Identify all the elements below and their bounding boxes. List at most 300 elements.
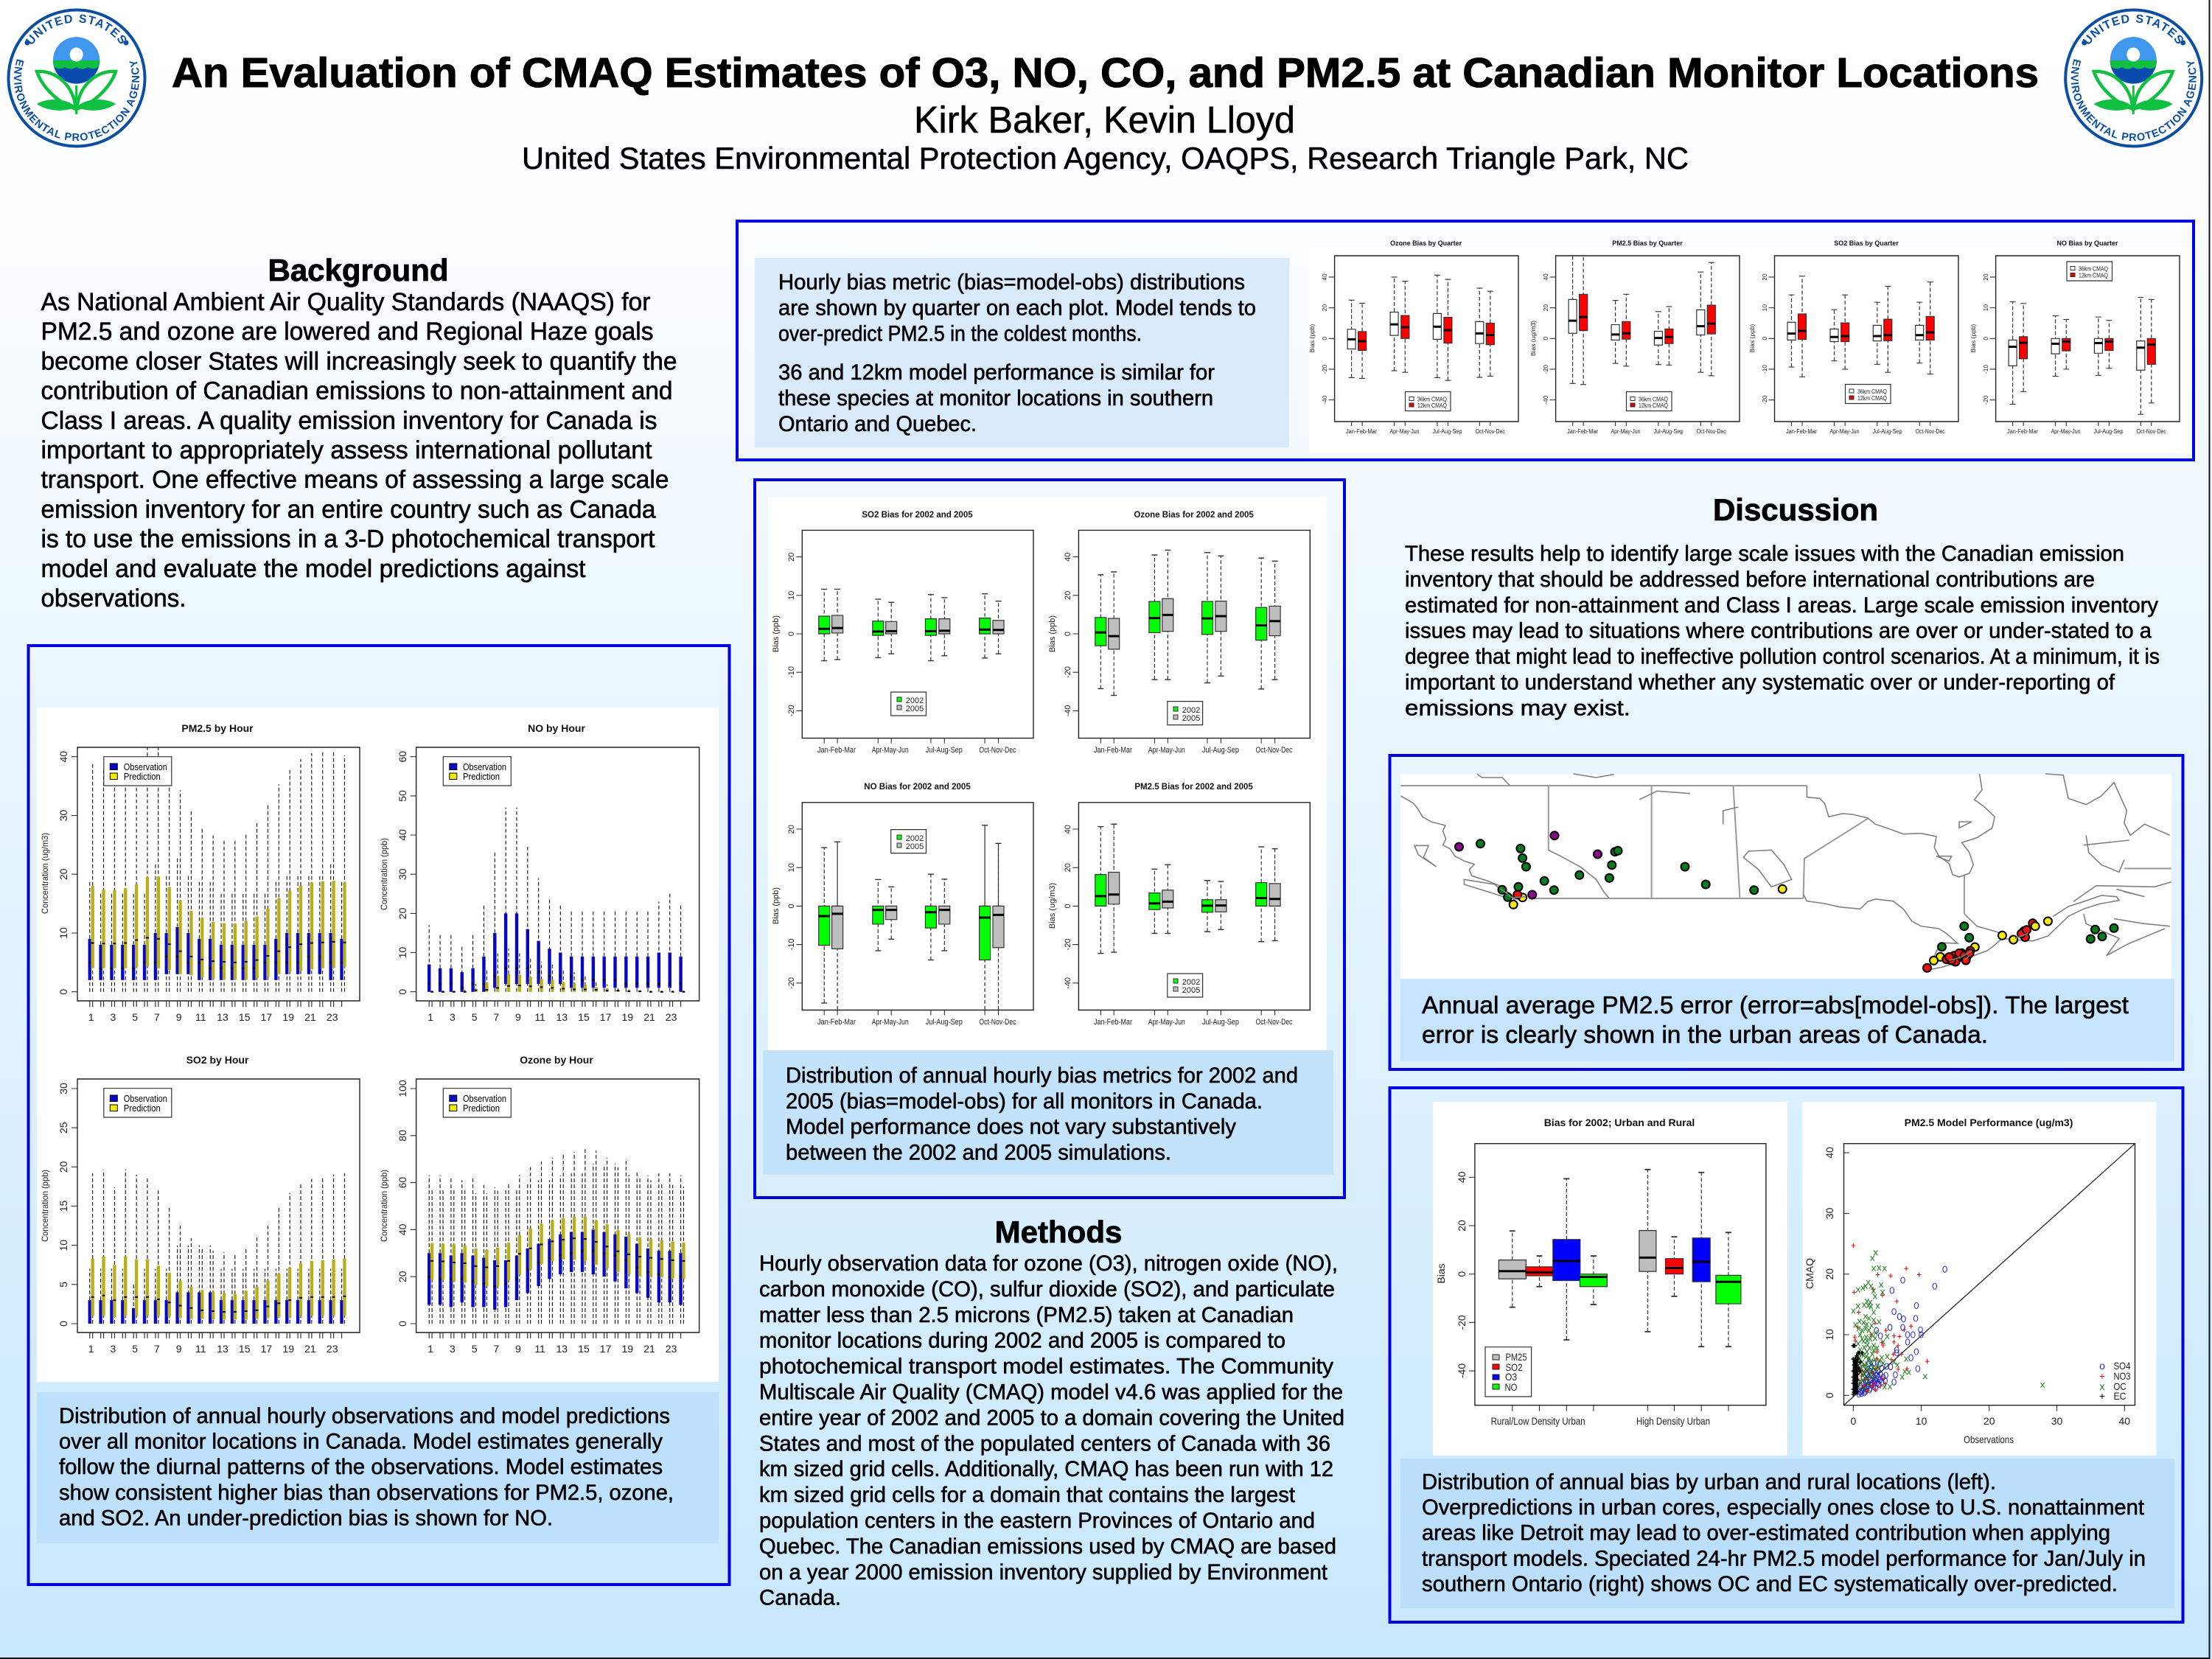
chart: Bias for 2002 Urban and Rural: PM25	[1505, 1351, 1527, 1363]
chart: Ozone by Hour: 21	[643, 1343, 655, 1355]
text block: Methods: carbon monoxide (CO), sulfur dioxide (SO2), and particulate	[759, 1277, 1335, 1302]
caption: hourly distributions: show consistent higher bias than observations for PM2.5, ozone,	[59, 1481, 674, 1505]
chart: PM2.5 Model Performance: EC	[2114, 1390, 2126, 1402]
chart: Ozone Bias by Quarter: Jul-Aug-Sep	[1433, 427, 1462, 435]
chart: NO by Hour: NO by Hour	[528, 722, 585, 734]
chart: PM2.5 Bias by Quarter: PM2.5 Bias by Quarter	[1612, 240, 1683, 247]
chart: Bias for 2002 Urban and Rural: SO2	[1505, 1361, 1523, 1373]
affiliation: United States Environmental Protection Agency, OAQPS, Research Triangle Park, NC	[522, 141, 1689, 175]
chart: Bias for 2002 Urban and Rural: Bias for 2002; Urban and Rural	[1544, 1117, 1695, 1128]
chart: Ozone by Hour: 40	[397, 1223, 408, 1235]
chart: SO2 by Hour: 5	[57, 1282, 69, 1288]
chart: PM2.5 by Hour: 0	[57, 989, 69, 995]
chart: PM2.5 by Hour: 13	[217, 1011, 228, 1023]
icon: EPA logo right: ENVIRONMENTAL PROTECTION AGENCY	[2071, 59, 2197, 142]
chart: NO Bias by Quarter: 20	[1982, 273, 1989, 281]
chart: SO2 by Hour: 19	[282, 1343, 294, 1355]
chart: NO Bias for 2002 and 2005: Jul-Aug-Sep	[926, 1018, 963, 1027]
chart: Bias for 2002 Urban and Rural: 0	[1456, 1271, 1468, 1277]
text block: Methods	[759, 1251, 1344, 1610]
panel: urban rural and PM2.5 performance	[1390, 1088, 2183, 1622]
chart: NO Bias by Quarter: NO Bias by Quarter	[2056, 240, 2118, 247]
chart: Ozone Bias by Quarter: -20	[1321, 365, 1328, 374]
chart: PM2.5 Model Performance: OC	[2114, 1380, 2126, 1392]
chart: Ozone by Hour: 0	[397, 1321, 408, 1327]
chart: Ozone by Hour: 17	[600, 1343, 612, 1355]
text block: Methods: on a year 2000 emission inventory supplied by Environment	[759, 1560, 1327, 1585]
chart: Ozone Bias by Quarter: -40	[1321, 395, 1328, 405]
chart: Ozone Bias by Quarter: Ozone Bias by Quarter	[1390, 240, 1462, 247]
chart: NO Bias for 2002 and 2005: Jan-Feb-Mar	[817, 1018, 856, 1027]
chart: PM2.5 Bias by Quarter	[1529, 240, 1740, 435]
chart: PM2.5 Model Performance: Observations	[1964, 1433, 2014, 1445]
text block: Discussion: issues may lead to situations where contributions are over or under-stated to a	[1405, 619, 2152, 643]
chart: NO by Hour: 40	[397, 829, 408, 841]
caption: urban rural and PM2.5 performance: Overpredictions in urban cores, especially ones close to U.S. nonattainment	[1422, 1495, 2144, 1520]
chart: SO2 by Hour: 17	[261, 1343, 272, 1355]
chart: NO Bias for 2002 and 2005: Apr-May-Jun	[872, 1018, 909, 1027]
text block: Discussion	[1405, 542, 2160, 720]
text block: Methods: entire year of 2002 and 2005 to a domain covering the United	[759, 1405, 1344, 1430]
chart: Ozone Bias for 2002 and 2005: 0	[1064, 632, 1072, 636]
caption: PM2.5 error map: Annual average PM2.5 error (error=abs[model-obs]). The largest	[1422, 991, 2129, 1019]
chart: PM2.5 Model Performance: 20	[1984, 1415, 1995, 1427]
chart: PM2.5 Bias by Quarter: 40	[1542, 273, 1549, 281]
chart: PM2.5 Bias by Quarter: 20	[1542, 304, 1549, 311]
chart: NO Bias for 2002 and 2005: 2005	[906, 842, 924, 851]
chart: SO2 Bias for 2002 and 2005	[772, 511, 1033, 755]
text block: Methods: monitor locations during 2002 and 2005 is compared to	[759, 1329, 1285, 1353]
chart: PM2.5 Bias for 2002 and 2005: Apr-May-Jun	[1148, 1018, 1185, 1027]
text block: Background: observations.	[41, 584, 186, 612]
icon: EPA logo left: ENVIRONMENTAL PROTECTION AGENCY	[14, 59, 139, 142]
chart: Ozone Bias for 2002 and 2005: Ozone Bias for 2002 and 2005	[1134, 511, 1254, 520]
panel: hourly distributions	[28, 646, 730, 1585]
chart: Ozone Bias for 2002 and 2005: Bias (ppb)	[1048, 615, 1057, 652]
chart: NO by Hour: 3	[450, 1011, 456, 1023]
chart: NO by Hour: 0	[397, 989, 408, 995]
chart: SO2 by Hour: 21	[304, 1343, 316, 1355]
chart: SO2 Bias by Quarter: Jan-Feb-Mar	[1786, 427, 1817, 435]
text block: Background: become closer States will increasingly seek to quantify the	[41, 348, 677, 376]
chart: PM2.5 by Hour: 23	[327, 1011, 338, 1023]
chart: Ozone Bias for 2002 and 2005	[1048, 511, 1310, 755]
text block: Discussion: These results help to identify large scale issues with the Canadian emission	[1405, 542, 2124, 566]
chart: Ozone Bias by Quarter: Bias (ppb)	[1308, 324, 1316, 352]
chart: SO2 Bias by Quarter: 36km CMAQ	[1857, 388, 1887, 395]
text block: Methods: matter less than 2.5 microns (PM2.5) taken at Canadian	[759, 1303, 1294, 1327]
chart: SO2 Bias for 2002 and 2005: Jul-Aug-Sep	[926, 746, 963, 755]
text block: Discussion: degree that might lead to ineffective pollution control scenarios. At a minimum, it is	[1405, 645, 2160, 669]
chart: PM2.5 Model Performance: o	[2099, 1360, 2105, 1372]
chart: SO2 by Hour: 3	[111, 1343, 116, 1355]
text block: Background: model and evaluate the model predictions against	[41, 555, 586, 583]
text block: Background	[41, 288, 677, 612]
chart: PM2.5 Bias for 2002 and 2005: 2005	[1182, 986, 1200, 995]
chart: PM2.5 Bias for 2002 and 2005: Bias (ug/m3)	[1048, 883, 1057, 929]
chart: PM2.5 Model Performance: +	[2099, 1370, 2105, 1382]
chart: NO by Hour: 13	[557, 1011, 568, 1023]
chart: PM2.5 Bias for 2002 and 2005: 20	[1064, 863, 1072, 872]
chart: NO Bias for 2002 and 2005: NO Bias for 2002 and 2005	[864, 783, 971, 792]
chart: PM2.5 Model Performance: NO3	[2114, 1370, 2131, 1382]
chart: Ozone by Hour: 20	[397, 1271, 408, 1282]
chart: NO Bias by Quarter: 0	[1982, 337, 1989, 340]
chart: PM2.5 Bias for 2002 and 2005	[1048, 783, 1310, 1027]
chart: Bias for 2002 Urban and Rural: 20	[1456, 1220, 1468, 1232]
text block: Methods: population centers in the eastern Provinces of Ontario and	[759, 1509, 1315, 1533]
text block: Background: is to use the emissions in a 3-D photochemical transport	[41, 525, 655, 553]
text block: Background: emission inventory for an entire country such as Canada	[41, 495, 656, 523]
chart: Ozone Bias for 2002 and 2005: 2002	[1182, 706, 1200, 715]
chart: SO2 Bias for 2002 and 2005: Bias (ppb)	[772, 615, 781, 652]
chart: NO by Hour: Observation	[463, 761, 506, 772]
chart: Ozone by Hour: 15	[578, 1343, 590, 1355]
chart: Ozone by Hour: Prediction	[463, 1103, 500, 1114]
chart: Ozone by Hour: 7	[493, 1343, 499, 1355]
chart: NO Bias by Quarter: 36km CMAQ	[2079, 265, 2108, 273]
chart: NO by Hour: 11	[534, 1011, 545, 1023]
chart: Ozone by Hour: Observation	[463, 1093, 506, 1104]
text block: Methods: Multiscale Air Quality (CMAQ) model v4.6 was applied for the	[759, 1380, 1343, 1405]
chart: PM2.5 Model Performance: 0	[1851, 1415, 1857, 1427]
chart: SO2 Bias for 2002 and 2005: Oct-Nov-Dec	[979, 746, 1016, 755]
chart: PM2.5 by Hour: Observation	[124, 761, 167, 772]
chart: Ozone Bias for 2002 and 2005: Jul-Aug-Sep	[1202, 746, 1239, 755]
chart: PM2.5 Bias by Quarter: -40	[1542, 395, 1549, 405]
chart: NO Bias for 2002 and 2005: -20	[787, 977, 796, 989]
chart: SO2 Bias for 2002 and 2005: 2002	[906, 696, 924, 705]
chart: PM2.5 Model Performance: +	[2099, 1390, 2105, 1402]
chart: Ozone by Hour: 19	[622, 1343, 633, 1355]
chart: SO2 by Hour: 5	[132, 1343, 138, 1355]
chart: Ozone by Hour: 60	[397, 1177, 408, 1188]
chart: Ozone by Hour: Ozone by Hour	[520, 1054, 593, 1066]
text block: Discussion: important to understand whether any systematic over or under-reporting of	[1405, 671, 2115, 694]
chart: NO Bias for 2002 and 2005: 0	[787, 904, 796, 908]
chart: PM2.5 Model Performance: SO4	[2114, 1360, 2131, 1372]
chart: SO2 Bias for 2002 and 2005: 0	[787, 632, 796, 636]
chart: PM2.5 Bias by Quarter: -20	[1542, 365, 1549, 374]
chart: PM2.5 Model Performance: CMAQ	[1804, 1258, 1815, 1289]
chart: Ozone by Hour: 80	[397, 1130, 408, 1142]
chart: PM2.5 Bias for 2002 and 2005: 2002	[1182, 978, 1200, 987]
chart: Ozone Bias for 2002 and 2005: -40	[1064, 705, 1072, 716]
chart: NO Bias by Quarter	[1969, 240, 2180, 435]
chart: NO by Hour: 15	[578, 1011, 590, 1023]
chart: SO2 by Hour: 20	[57, 1161, 69, 1173]
chart: NO by Hour: 60	[397, 751, 408, 762]
chart: Bias for 2002 Urban and Rural: -20	[1456, 1315, 1468, 1330]
chart: PM2.5 Bias for 2002 and 2005: PM2.5 Bias for 2002 and 2005	[1134, 783, 1253, 792]
authors: Kirk Baker, Kevin Lloyd	[914, 99, 1295, 141]
chart: NO Bias by Quarter: Bias (ppb)	[1969, 324, 1977, 352]
chart: NO Bias by Quarter: -10	[1982, 365, 1989, 374]
chart: NO Bias for 2002 and 2005: 10	[787, 863, 796, 872]
chart: NO by Hour: 30	[397, 868, 408, 880]
caption: 2002 vs 2005 bias	[763, 1050, 1333, 1175]
text block: Methods: km sized grid cells. Additionally, CMAQ has been run with 12	[759, 1457, 1333, 1481]
caption: 2002 vs 2005 bias: between the 2002 and 2005 simulations.	[786, 1140, 1171, 1164]
chart: Ozone Bias by Quarter: Oct-Nov-Dec	[1476, 427, 1505, 435]
chart: Ozone Bias for 2002 and 2005: 2005	[1182, 714, 1200, 723]
chart: NO by Hour: 23	[666, 1011, 677, 1023]
chart: SO2 Bias for 2002 and 2005: Apr-May-Jun	[872, 746, 909, 755]
panel: bias by quarter	[737, 221, 2194, 460]
chart: Ozone by Hour: 9	[515, 1343, 521, 1355]
chart: SO2 Bias for 2002 and 2005: SO2 Bias for 2002 and 2005	[862, 511, 973, 520]
chart: PM2.5 Model Performance: 30	[1824, 1207, 1835, 1219]
chart: NO Bias by Quarter: -20	[1982, 395, 1989, 405]
chart: SO2 Bias by Quarter: Oct-Nov-Dec	[1916, 427, 1945, 435]
chart: PM2.5 Bias by Quarter: 0	[1542, 337, 1549, 340]
text block: Background: Class I areas. A quality emission inventory for Canada is	[41, 407, 657, 435]
chart: PM2.5 Bias for 2002 and 2005: 0	[1064, 904, 1072, 908]
chart: SO2 Bias by Quarter	[1748, 240, 1958, 435]
chart: PM2.5 by Hour: 9	[176, 1011, 182, 1023]
chart: PM2.5 Model Performance: 30	[2051, 1415, 2062, 1427]
chart: PM2.5 Model Performance: 10	[1824, 1329, 1835, 1341]
chart: NO by Hour: 7	[493, 1011, 499, 1023]
chart: Bias for 2002 Urban and Rural: Bias	[1435, 1263, 1447, 1284]
chart: NO Bias for 2002 and 2005	[772, 783, 1033, 1027]
chart: Ozone by Hour	[379, 1054, 699, 1355]
chart: Bias for 2002 Urban and Rural	[1435, 1117, 1766, 1427]
heading: Discussion: Discussion	[1713, 492, 1878, 527]
chart: PM2.5 Bias for 2002 and 2005: Jul-Aug-Sep	[1202, 1018, 1239, 1027]
chart: PM2.5 by Hour: 3	[111, 1011, 116, 1023]
chart: SO2 by Hour: SO2 by Hour	[186, 1054, 249, 1066]
chart: Ozone Bias by Quarter: 12km CMAQ	[1417, 402, 1447, 409]
chart: SO2 Bias by Quarter: SO2 Bias by Quarter	[1834, 240, 1899, 247]
caption: PM2.5 error map	[1400, 979, 2174, 1061]
chart: NO by Hour: 9	[515, 1011, 521, 1023]
icon: EPA logo right: UNITED STATES	[2083, 15, 2183, 44]
caption: PM2.5 error map: error is clearly shown in the urban areas of Canada.	[1422, 1021, 1988, 1048]
chart: NO Bias by Quarter: Jan-Feb-Mar	[2007, 427, 2038, 435]
caption: urban rural and PM2.5 performance: Distribution of annual bias by urban and rural locations (left).	[1422, 1470, 1996, 1495]
chart: PM2.5 Model Performance: 20	[1824, 1268, 1835, 1279]
caption: bias by quarter: Ontario and Quebec.	[778, 412, 977, 436]
chart: Ozone Bias by Quarter: 36km CMAQ	[1417, 395, 1447, 402]
icon: EPA logo left	[7, 9, 146, 147]
chart: SO2 Bias by Quarter: 0	[1761, 337, 1768, 340]
chart: NO by Hour: 5	[472, 1011, 478, 1023]
chart: PM2.5 Bias by Quarter: Apr-May-Jun	[1611, 427, 1641, 435]
chart: PM2.5 Bias for 2002 and 2005: -40	[1064, 977, 1072, 989]
chart: NO Bias by Quarter: 12km CMAQ	[2079, 271, 2108, 279]
chart: Ozone Bias by Quarter	[1308, 240, 1518, 435]
chart: PM2.5 by Hour: PM2.5 by Hour	[181, 722, 254, 734]
caption: hourly distributions: over all monitor locations in Canada. Model estimates generally	[59, 1430, 663, 1454]
chart: SO2 Bias for 2002 and 2005: 10	[787, 591, 796, 600]
chart: SO2 by Hour: 15	[57, 1201, 69, 1212]
chart: SO2 by Hour: 25	[57, 1122, 69, 1134]
chart: PM2.5 Bias for 2002 and 2005: Oct-Nov-Dec	[1256, 1018, 1293, 1027]
chart: Ozone by Hour: 3	[450, 1343, 456, 1355]
chart: Ozone by Hour: 23	[666, 1343, 677, 1355]
chart: NO by Hour: Concentration (ppb)	[379, 838, 389, 910]
chart: NO by Hour: 19	[622, 1011, 633, 1023]
caption: urban rural and PM2.5 performance: southern Ontario (right) shows OC and EC systematically over-predicted.	[1422, 1572, 2118, 1596]
chart: PM2.5 Bias by Quarter: 36km CMAQ	[1639, 395, 1668, 402]
chart: NO Bias for 2002 and 2005: -10	[787, 938, 796, 950]
text block: Background: PM2.5 and ozone are lowered and Regional Haze goals	[41, 318, 653, 346]
chart: SO2 by Hour: 0	[57, 1321, 69, 1327]
chart: PM2.5 Bias by Quarter: Bias (ug/m3)	[1529, 321, 1537, 356]
chart: SO2 by Hour: 10	[57, 1240, 69, 1251]
chart: PM2.5 by Hour: 17	[261, 1011, 272, 1023]
chart: SO2 Bias for 2002 and 2005: -10	[787, 666, 796, 678]
chart: NO Bias for 2002 and 2005: 20	[787, 825, 796, 834]
chart: SO2 by Hour: 9	[176, 1343, 182, 1355]
chart: PM2.5 by Hour: 20	[57, 868, 69, 880]
chart: SO2 by Hour: Observation	[124, 1093, 167, 1104]
caption: urban rural and PM2.5 performance	[1400, 1459, 2174, 1608]
chart: NO Bias by Quarter: Jul-Aug-Sep	[2093, 427, 2124, 435]
chart: SO2 Bias for 2002 and 2005: 2005	[906, 705, 924, 713]
caption: hourly distributions	[37, 1392, 719, 1543]
chart: Ozone Bias for 2002 and 2005: Jan-Feb-Mar	[1094, 746, 1132, 755]
chart: SO2 Bias by Quarter: Bias (ppb)	[1748, 324, 1756, 352]
chart: NO by Hour: 17	[600, 1011, 612, 1023]
chart: Ozone Bias for 2002 and 2005: Oct-Nov-Dec	[1256, 746, 1293, 755]
chart: NO Bias for 2002 and 2005: Oct-Nov-Dec	[979, 1018, 1016, 1027]
chart: SO2 by Hour: 7	[154, 1343, 160, 1355]
chart: SO2 by Hour: Concentration (ppb)	[40, 1170, 50, 1242]
chart: NO by Hour	[379, 722, 699, 1023]
caption: hourly distributions: Distribution of annual hourly observations and model predictions	[59, 1404, 670, 1428]
chart: SO2 Bias by Quarter: 12km CMAQ	[1857, 394, 1887, 402]
chart: NO Bias by Quarter: Oct-Nov-Dec	[2137, 427, 2166, 435]
caption: 2002 vs 2005 bias: Distribution of annual hourly bias metrics for 2002 and	[786, 1063, 1298, 1088]
map: Canada monitor locations	[1400, 774, 2171, 972]
chart: Ozone Bias by Quarter: 20	[1321, 304, 1328, 311]
chart: Ozone Bias for 2002 and 2005: 40	[1064, 553, 1072, 562]
chart: Bias for 2002 Urban and Rural: O3	[1505, 1371, 1517, 1383]
chart: Ozone by Hour: 100	[397, 1080, 408, 1097]
icon: EPA logo left: UNITED STATES	[25, 15, 127, 44]
chart: NO by Hour: 1	[428, 1011, 433, 1023]
text block: Methods: Hourly observation data for ozone (O3), nitrogen oxide (NO),	[759, 1251, 1338, 1276]
caption: bias by quarter: these species at monitor locations in southern	[778, 386, 1213, 411]
caption: bias by quarter: 36 and 12km model performance is similar for	[778, 360, 1215, 385]
chart: PM2.5 Bias by Quarter: Jul-Aug-Sep	[1654, 427, 1684, 435]
chart: PM2.5 Bias by Quarter: 12km CMAQ	[1639, 402, 1668, 409]
chart: SO2 Bias by Quarter: 10	[1761, 304, 1768, 311]
chart: PM2.5 by Hour: 30	[57, 810, 69, 821]
chart: Ozone Bias by Quarter: Apr-May-Jun	[1390, 427, 1420, 435]
chart: NO by Hour: 10	[397, 947, 408, 958]
chart: PM2.5 by Hour: 7	[154, 1011, 160, 1023]
chart: PM2.5 by Hour: 15	[239, 1011, 251, 1023]
chart: PM2.5 Model Performance: 0	[1824, 1392, 1835, 1398]
chart: SO2 Bias for 2002 and 2005: 20	[787, 553, 796, 562]
chart: SO2 by Hour: Prediction	[124, 1103, 161, 1114]
chart: Ozone by Hour: 5	[472, 1343, 478, 1355]
text block: Methods: km sized grid cells for a domain that contains the largest	[759, 1483, 1295, 1507]
text block: Methods: Quebec. The Canadian emissions used by CMAQ are based	[759, 1534, 1336, 1559]
panel: 2002 vs 2005 bias	[755, 480, 1344, 1198]
text block: Methods: Canada.	[759, 1586, 841, 1610]
chart: PM2.5 by Hour: 5	[132, 1011, 138, 1023]
chart: PM2.5 Bias for 2002 and 2005: Jan-Feb-Mar	[1094, 1018, 1132, 1027]
chart: NO by Hour: 50	[397, 790, 408, 802]
panel: PM2.5 error map	[1390, 755, 2183, 1069]
chart: Ozone Bias by Quarter: 0	[1321, 337, 1328, 340]
chart: NO Bias for 2002 and 2005: 2002	[906, 834, 924, 843]
heading: Methods: Methods	[995, 1215, 1122, 1249]
chart: PM2.5 by Hour: 10	[57, 927, 69, 939]
title: An Evaluation of CMAQ Estimates of O3, NO, CO, and PM2.5 at Canadian Monitor Locations	[172, 49, 2039, 97]
chart: SO2 Bias for 2002 and 2005: -20	[787, 705, 796, 716]
chart: PM2.5 by Hour: 21	[304, 1011, 316, 1023]
chart: SO2 Bias for 2002 and 2005: Jan-Feb-Mar	[817, 746, 856, 755]
chart: SO2 by Hour: 23	[327, 1343, 338, 1355]
chart: PM2.5 Model Performance: PM2.5 Model Performance (ug/m3)	[1905, 1117, 2073, 1128]
chart: PM2.5 by Hour: Concentration (ug/m3)	[40, 833, 50, 914]
chart: SO2 by Hour: 13	[217, 1343, 228, 1355]
chart: PM2.5 by Hour: 40	[57, 751, 69, 762]
text block: Background: transport. One effective means of assessing a large scale	[41, 466, 669, 494]
chart: NO Bias by Quarter: 10	[1982, 304, 1989, 311]
chart: Ozone Bias by Quarter: 40	[1321, 273, 1328, 281]
chart: Ozone Bias for 2002 and 2005: Apr-May-Jun	[1148, 746, 1185, 755]
caption: hourly distributions: follow the diurnal patterns of the observations. Model estimates	[59, 1455, 663, 1479]
text block: Methods: States and most of the populated centers of Canada with 36	[759, 1431, 1330, 1456]
chart: SO2 Bias by Quarter: Jul-Aug-Sep	[1872, 427, 1902, 435]
chart: PM2.5 by Hour	[40, 722, 360, 1023]
caption: bias by quarter: Hourly bias metric (bias=model-obs) distributions	[778, 270, 1245, 295]
chart: NO by Hour: Prediction	[463, 771, 500, 782]
chart: Bias for 2002 Urban and Rural: NO	[1505, 1381, 1518, 1393]
chart: SO2 Bias by Quarter: Apr-May-Jun	[1829, 427, 1860, 435]
chart: SO2 by Hour: 1	[88, 1343, 94, 1355]
chart: SO2 by Hour: 30	[57, 1083, 69, 1094]
chart: SO2 by Hour: 15	[239, 1343, 251, 1355]
chart: NO by Hour: 21	[643, 1011, 655, 1023]
chart: PM2.5 by Hour: Prediction	[124, 771, 161, 782]
chart: PM2.5 Model Performance	[1804, 1117, 2135, 1445]
chart: Ozone by Hour: 13	[557, 1343, 568, 1355]
chart: PM2.5 Model Performance: 40	[1824, 1147, 1835, 1159]
text block: Discussion: inventory that should be addressed before international contributions are	[1405, 567, 2095, 592]
heading: Background: Background	[268, 253, 449, 287]
chart: SO2 Bias by Quarter: -10	[1761, 365, 1768, 374]
chart: Bias for 2002 Urban and Rural: Rural/Low Density Urban	[1491, 1415, 1585, 1427]
chart: SO2 by Hour	[40, 1054, 360, 1355]
text block: Background: As National Ambient Air Quality Standards (NAAQS) for	[41, 288, 650, 316]
chart: SO2 by Hour: 11	[195, 1343, 206, 1355]
text block: Discussion: estimated for non-attainment and Class I areas. Large scale emission inventory	[1405, 593, 2158, 618]
text block: Methods: photochemical transport model estimates. The Community	[759, 1355, 1333, 1379]
chart: Ozone by Hour: Concentration (ppb)	[379, 1170, 389, 1242]
caption: bias by quarter: over-predict PM2.5 in the coldest months.	[778, 322, 1142, 346]
chart: Ozone Bias for 2002 and 2005: 20	[1064, 591, 1072, 600]
chart: Ozone Bias for 2002 and 2005: -20	[1064, 666, 1072, 678]
chart: PM2.5 Model Performance: 40	[2119, 1415, 2130, 1427]
caption: bias by quarter	[755, 258, 1289, 447]
chart: PM2.5 Bias by Quarter: Oct-Nov-Dec	[1697, 427, 1726, 435]
caption: 2002 vs 2005 bias: 2005 (bias=model-obs) for all monitors in Canada.	[786, 1089, 1263, 1114]
chart: PM2.5 Bias by Quarter: Jan-Feb-Mar	[1567, 427, 1598, 435]
text block: Background: important to appropriately assess international pollutant	[41, 436, 652, 464]
chart: PM2.5 Model Performance: 10	[1916, 1415, 1927, 1427]
chart: Bias for 2002 Urban and Rural: 40	[1456, 1171, 1468, 1183]
caption: bias by quarter: are shown by quarter on each plot. Model tends to	[778, 296, 1256, 320]
caption: urban rural and PM2.5 performance: areas like Detroit may lead to over-estimated contribution when applying	[1422, 1521, 2110, 1546]
chart: PM2.5 Bias for 2002 and 2005: 40	[1064, 825, 1072, 834]
